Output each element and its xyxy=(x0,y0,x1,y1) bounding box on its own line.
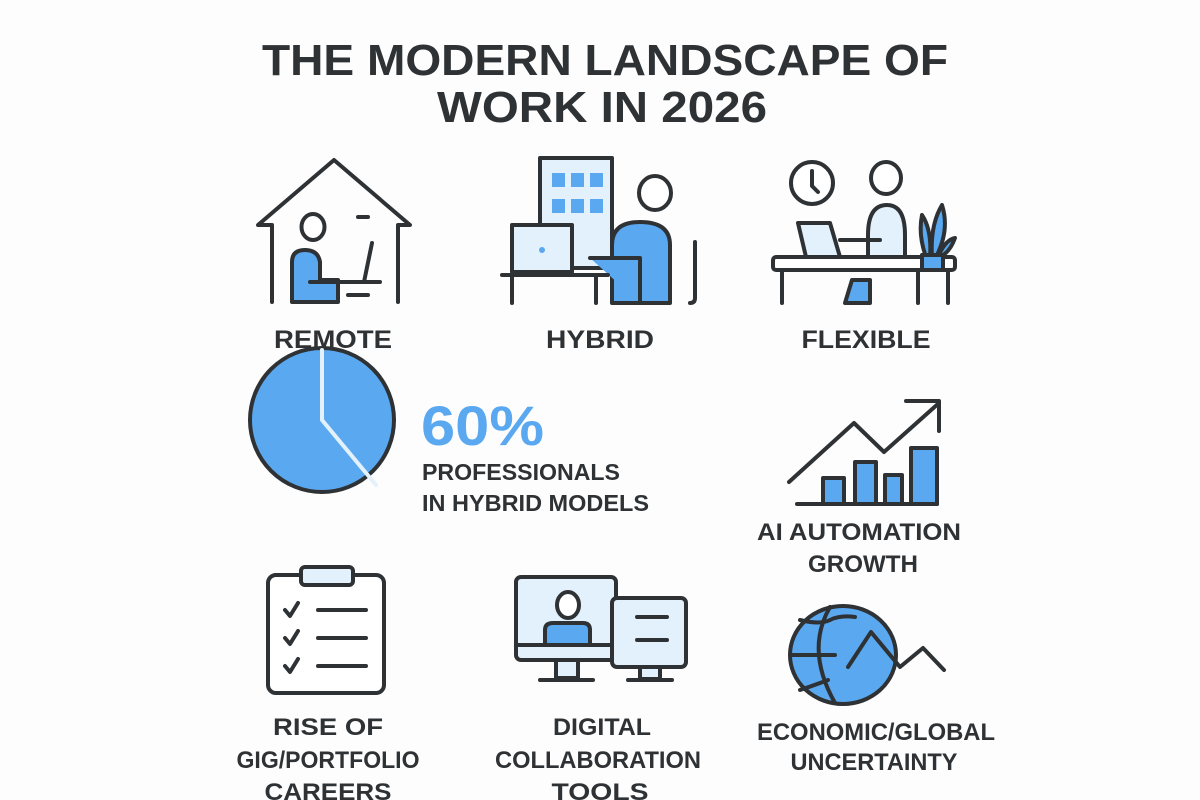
label: gig careers: RISE OF xyxy=(273,714,383,741)
stat: 60%: IN HYBRID MODELS xyxy=(422,490,649,516)
icon: clipboard xyxy=(268,567,384,693)
label: economic uncertainty: UNCERTAINTY xyxy=(790,749,958,776)
icon: hybrid xyxy=(502,158,695,303)
label: economic uncertainty xyxy=(757,719,995,776)
label: AI automation: GROWTH xyxy=(808,551,918,578)
stat: 60%: PROFESSIONALS xyxy=(422,459,620,485)
chart: AI growth xyxy=(789,401,939,504)
label: hybrid: HYBRID xyxy=(546,326,654,354)
label: economic uncertainty: ECONOMIC/GLOBAL xyxy=(757,719,995,746)
label: AI automation xyxy=(757,519,961,578)
label: remote: REMOTE xyxy=(274,326,392,354)
label: digital tools: COLLABORATION xyxy=(495,747,701,774)
label: AI automation: AI AUTOMATION xyxy=(757,519,961,546)
stat: 60% xyxy=(421,394,649,516)
label: digital tools xyxy=(495,714,701,800)
icon: flexible xyxy=(773,162,955,303)
icon: monitors xyxy=(516,577,686,680)
label: flexible: FLEXIBLE xyxy=(802,326,930,354)
icon: remote house xyxy=(258,160,410,302)
label: gig careers xyxy=(236,714,420,800)
stat: 60%: 60% xyxy=(421,394,544,457)
icon: globe xyxy=(790,606,944,704)
pie chart xyxy=(250,348,394,492)
label: gig careers: GIG/PORTFOLIO xyxy=(236,747,420,774)
title: WORK IN 2026 xyxy=(437,83,767,132)
title xyxy=(262,36,948,132)
title: THE MODERN LANDSCAPE OF xyxy=(262,36,948,85)
label: digital tools: DIGITAL xyxy=(553,714,651,741)
